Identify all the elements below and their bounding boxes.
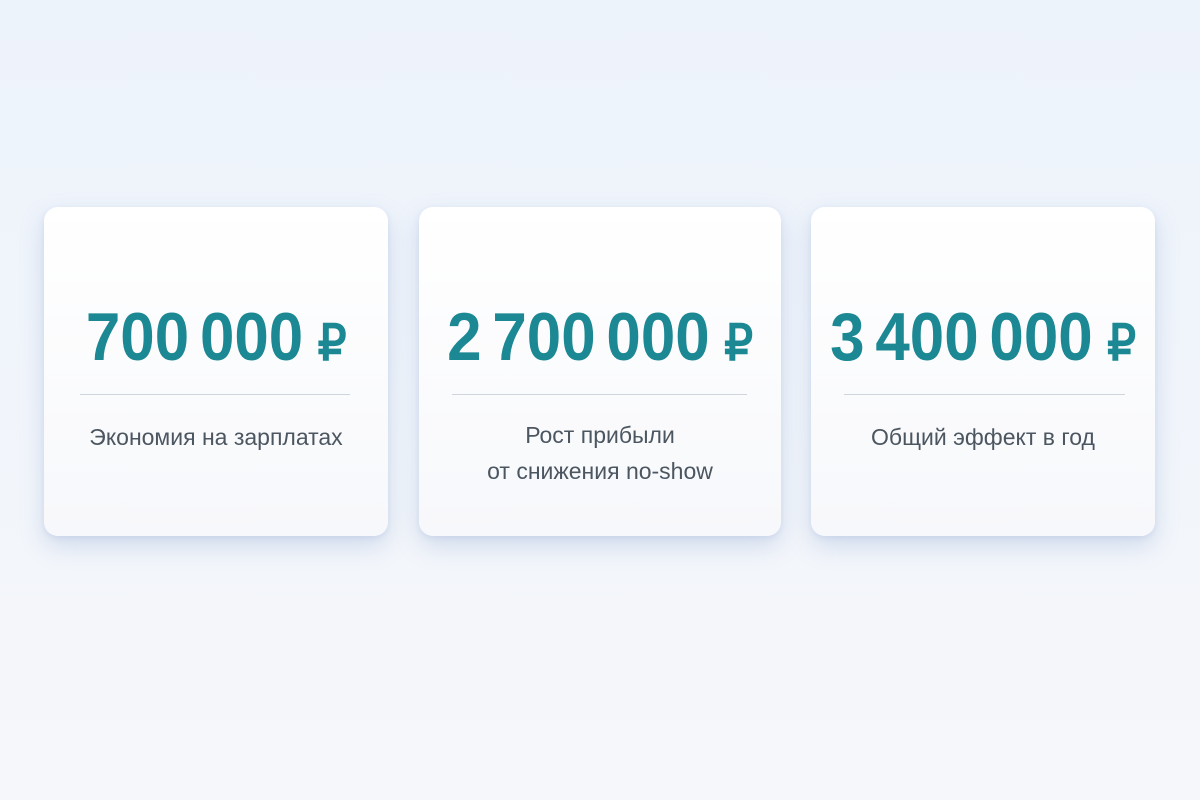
label: profit growth: от снижения no-show [487,458,713,484]
card: profit growth [419,207,781,536]
number: 700 000: 700 000 ₽ [86,299,346,375]
label: profit growth [487,422,713,484]
label: total effect: Общий эффект в год [871,424,1095,450]
label: salary savings: Экономия на зарплатах [89,424,343,450]
label: profit growth: Рост прибыли [525,422,675,448]
card: total effect [811,207,1155,536]
number: 3 400 000: 3 400 000 ₽ [830,299,1136,375]
number: 2 700 000: 2 700 000 ₽ [447,299,753,375]
card: salary savings [44,207,388,536]
